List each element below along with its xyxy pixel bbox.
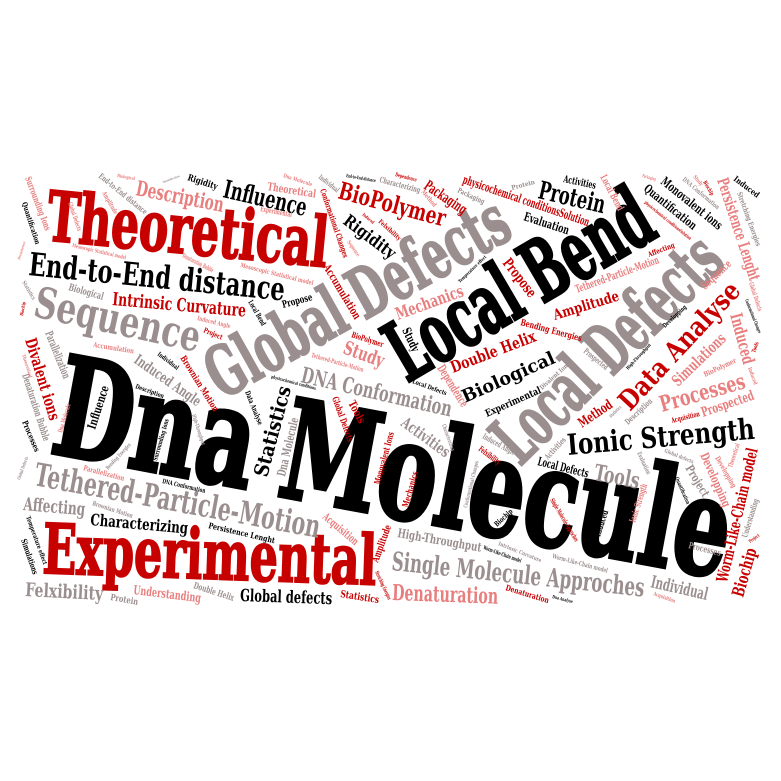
word: Characterizing: Characterizing xyxy=(440,424,455,452)
word: Surrounding Ions: Surrounding Ions xyxy=(22,175,52,232)
word: Packaging: Packaging xyxy=(456,186,486,206)
word: Single Molecule Approches: Single Molecule Approches xyxy=(390,547,646,604)
word: Data Analyse: Data Analyse xyxy=(243,389,265,426)
word: Tethered-Particle-Motion: Tethered-Particle-Motion xyxy=(310,352,365,374)
word: Statistics: Statistics xyxy=(20,280,36,301)
word: Intrinsic Curvature: Intrinsic Curvature xyxy=(112,289,247,322)
word: Individual: Individual xyxy=(156,351,180,372)
word: Biochip: Biochip xyxy=(492,507,514,528)
word: Worm-Like-Chain model: Worm-Like-Chain model xyxy=(482,545,522,565)
word: Local Defects: Local Defects xyxy=(411,378,448,397)
word: High-Throughput: High-Throughput xyxy=(190,414,206,446)
word: Dna Molecule: Dna Molecule xyxy=(274,416,301,478)
word: Induced Angle: Induced Angle xyxy=(131,351,204,410)
word: Global defects: Global defects xyxy=(240,586,332,609)
word: Global defects: Global defects xyxy=(663,448,694,465)
word: Influence: Influence xyxy=(85,384,112,431)
word: Dna Molecule: Dna Molecule xyxy=(282,173,313,188)
word: Mechanics: Mechanics xyxy=(401,471,421,509)
word: Quantification: Quantification xyxy=(162,174,180,184)
word: Experimental: Experimental xyxy=(484,385,543,420)
word: Biological: Biological xyxy=(117,173,136,182)
word: Dependence: Dependence xyxy=(394,172,418,184)
word: Description: Description xyxy=(134,383,165,400)
word: Bending Energies: Bending Energies xyxy=(519,318,583,344)
word: DNA Conformation: DNA Conformation xyxy=(681,176,721,211)
word: Single Molecule Approches: Single Molecule Approches xyxy=(548,497,580,543)
word: Induced: Induced xyxy=(361,212,376,226)
word: Activities: Activities xyxy=(542,435,568,462)
word: Characterizing: Characterizing xyxy=(378,174,422,195)
word: Amplitude: Amplitude xyxy=(370,524,394,565)
word: Rigidity: Rigidity xyxy=(339,211,400,264)
word: Tethered-Particle-Motion: Tethered-Particle-Motion xyxy=(32,456,324,546)
word: Tools: Tools xyxy=(345,398,368,426)
word: Ionic Strength: Ionic Strength xyxy=(628,483,650,524)
word: Statistics: Statistics xyxy=(608,404,623,419)
word: Dna Analyse: Dna Analyse xyxy=(552,594,573,605)
word: Denaturation Bubble: Denaturation Bubble xyxy=(19,373,51,443)
word: Global Defects: Global Defects xyxy=(66,201,83,232)
word: Acquisition: Acquisition xyxy=(320,510,361,548)
word: Tools: Tools xyxy=(592,459,642,495)
word: Developping: Developping xyxy=(713,454,739,489)
word: Mechanics: Mechanics xyxy=(393,282,466,325)
word: BioPolymer: BioPolymer xyxy=(702,356,738,379)
word: End-to-End distance: End-to-End distance xyxy=(346,173,376,184)
word: Project: Project xyxy=(682,462,713,500)
word: Activities: Activities xyxy=(562,174,597,192)
word: physicochemical conditionsSolution: physicochemical conditionsSolution xyxy=(643,200,693,242)
word: Propose: Propose xyxy=(281,292,314,311)
word: Theoretical: Theoretical xyxy=(43,176,332,284)
word: Biochip: Biochip xyxy=(729,546,762,599)
word: Individual: Individual xyxy=(649,572,710,605)
word: Biochip: Biochip xyxy=(701,180,715,197)
word: Global Defects: Global Defects xyxy=(747,281,763,312)
word: Amplitude: Amplitude xyxy=(100,190,119,216)
word: Induced: Induced xyxy=(746,367,758,386)
word: Induced Angle: Induced Angle xyxy=(481,431,517,457)
word: Affecting: Affecting xyxy=(22,494,86,520)
word: Stretching Energies: Stretching Energies xyxy=(735,191,763,247)
word: Monovalent Ions: Monovalent Ions xyxy=(373,431,397,486)
word: Conformational Changes: Conformational Changes xyxy=(743,299,762,334)
word: High-Throughput: High-Throughput xyxy=(625,342,653,371)
word: Induced: Induced xyxy=(592,509,611,538)
word: Processes: Processes xyxy=(656,369,748,418)
word: Monovalent ions: Monovalent ions xyxy=(658,174,726,233)
word: Global Defects: Global Defects xyxy=(16,456,30,481)
word: Global Defects: Global Defects xyxy=(191,180,524,415)
word: Understanding: Understanding xyxy=(739,497,761,539)
word: Induced Angle: Induced Angle xyxy=(197,315,231,330)
word: Influence: Influence xyxy=(221,175,310,222)
word: Evaluation: Evaluation xyxy=(635,451,652,476)
word: Statistics: Statistics xyxy=(249,383,296,479)
word: Dna Molecule: Dna Molecule xyxy=(57,403,73,434)
word: Amplitude: Amplitude xyxy=(550,288,621,324)
word: Activities: Activities xyxy=(397,412,454,461)
word: Affecting: Affecting xyxy=(646,240,676,259)
word: Experimental: Experimental xyxy=(41,509,378,602)
word: Parallelization: Parallelization xyxy=(82,463,126,483)
word: physicochemical conditions: physicochemical conditions xyxy=(270,374,317,392)
word: physicochemical conditionsSolution: physicochemical conditionsSolution xyxy=(461,173,591,229)
word: Conformational Changes: Conformational Changes xyxy=(463,460,481,508)
word: Stretching Energies: Stretching Energies xyxy=(373,570,392,601)
word: Worm-Like-Chain model: Worm-Like-Chain model xyxy=(712,446,762,585)
word: Study: Study xyxy=(399,325,423,355)
word: Biological: Biological xyxy=(458,348,559,408)
word cloud: Denaturation Bubble xyxy=(181,253,215,274)
word: Sequence: Sequence xyxy=(698,257,734,292)
word: Evaluation: Evaluation xyxy=(522,210,571,237)
word: Local Bend: Local Bend xyxy=(597,173,625,213)
word: BioPolymer: BioPolymer xyxy=(350,329,385,349)
word: Brownian Motion: Brownian Motion xyxy=(91,500,134,520)
word: End-to-End distance: End-to-End distance xyxy=(27,245,287,308)
word: Protein: Protein xyxy=(536,176,608,219)
word: Theoretical: Theoretical xyxy=(267,180,317,201)
word: Prospected: Prospected xyxy=(582,346,611,372)
word: Divalent ions: Divalent ions xyxy=(21,336,64,422)
word: Sequence: Sequence xyxy=(30,278,205,363)
word: Induced: Induced xyxy=(732,174,762,200)
word: Rigidity: Rigidity xyxy=(186,173,219,193)
word: Persistence Lenght: Persistence Lenght xyxy=(208,520,276,545)
word: Developping: Developping xyxy=(697,451,734,510)
word: End-to-End distance: End-to-End distance xyxy=(97,171,150,216)
word: Theoretical: Theoretical xyxy=(20,354,33,379)
word: Processes: Processes xyxy=(687,541,722,559)
word: Method: Method xyxy=(419,189,438,209)
word: Felxibility: Felxibility xyxy=(25,579,104,605)
word: Description: Description xyxy=(134,175,226,217)
word: Individual: Individual xyxy=(317,172,341,194)
word: Method: Method xyxy=(575,397,616,431)
word: DNA Conformation: DNA Conformation xyxy=(162,478,206,495)
word: Packaging: Packaging xyxy=(421,177,470,218)
word: Persistence: Persistence xyxy=(17,240,27,260)
word: Characterizing: Characterizing xyxy=(90,510,189,538)
word: Parallelization: Parallelization xyxy=(42,329,73,380)
word: Accumulation: Accumulation xyxy=(320,261,364,322)
word: Dependence: Dependence xyxy=(434,362,471,410)
word: Local Defects: Local Defects xyxy=(536,454,590,481)
word: Statistics: Statistics xyxy=(340,589,380,606)
word: Project: Project xyxy=(202,326,225,342)
word: Processes: Processes xyxy=(20,419,42,453)
word: Mesoscopic Statistical model: Mesoscopic Statistical model xyxy=(240,262,314,287)
word: Acquisition: Acquisition xyxy=(670,409,701,425)
word: Simulations: Simulations xyxy=(19,537,41,576)
word: Dna Molecule: Dna xyxy=(42,326,271,521)
word: Intrinsic Curvature: Intrinsic Curvature xyxy=(497,541,543,564)
word: Mesoscopic Statistical model: Mesoscopic Statistical model xyxy=(72,243,126,261)
word: Temperature effect: Temperature effect xyxy=(24,515,48,566)
word: Felxibility: Felxibility xyxy=(377,218,402,242)
word: Theoretical: Theoretical xyxy=(727,442,742,469)
word: BioPolymer: BioPolymer xyxy=(335,176,449,232)
word: Conformational Changes: Conformational Changes xyxy=(318,187,351,259)
word: Quantification: Quantification xyxy=(673,476,690,505)
word: Denaturation: Denaturation xyxy=(392,580,499,610)
word: Protein: Protein xyxy=(511,179,536,192)
word: Tethered-Particle-Motion: Tethered-Particle-Motion xyxy=(574,254,661,296)
word: Understanding: Understanding xyxy=(133,582,202,605)
word: Brownian Motion: Brownian Motion xyxy=(177,354,220,414)
word: Propose: Propose xyxy=(499,255,540,301)
word: High-Throughput: High-Throughput xyxy=(396,525,483,555)
word: Bending Energies: Bending Energies xyxy=(105,442,133,471)
word: Double Helix: Double Helix xyxy=(448,327,539,377)
word: DNA Conformation: DNA Conformation xyxy=(299,363,455,422)
word: Felxibility: Felxibility xyxy=(477,444,503,467)
word: Surrounding Ions: Surrounding Ions xyxy=(152,418,171,462)
word: Global Defects: Global Defects xyxy=(329,396,355,443)
word: Acquisition: Acquisition xyxy=(652,591,676,605)
word: Packaging: Packaging xyxy=(641,173,657,183)
word: Simulations: Simulations xyxy=(668,329,730,390)
word: Denaturation: Denaturation xyxy=(504,582,551,605)
word: Quantification: Quantification xyxy=(641,181,700,233)
word: Induced: Induced xyxy=(725,311,758,367)
word: Description: Description xyxy=(623,396,654,426)
word: Dna Molecule xyxy=(42,326,746,610)
word: Quantification: Quantification xyxy=(20,201,42,246)
word: Tools: Tools xyxy=(751,341,761,354)
word: Dependence: Dependence xyxy=(591,344,611,362)
word: Biological: Biological xyxy=(67,282,105,303)
word: Study: Study xyxy=(691,174,704,188)
word: Developping: Developping xyxy=(662,304,689,329)
word: Data Analyse: Data Analyse xyxy=(612,276,747,417)
word: Sequence: Sequence xyxy=(345,240,361,258)
word: Local Bend: Local Bend xyxy=(246,298,268,327)
word: Divalent Ions: Divalent Ions xyxy=(539,361,572,391)
word: Biochip: Biochip xyxy=(19,302,27,316)
word: Accumulation: Accumulation xyxy=(92,340,135,355)
word: Study: Study xyxy=(340,337,388,372)
word: Temperature effect: Temperature effect xyxy=(457,254,489,284)
word: Protein: Protein xyxy=(109,593,139,608)
word: Project: Project xyxy=(748,532,761,545)
word: Double Helix: Double Helix xyxy=(192,581,235,604)
word: Worm-Like-Chain model: Worm-Like-Chain model xyxy=(551,553,609,575)
word: Experimental: Experimental xyxy=(260,204,293,219)
